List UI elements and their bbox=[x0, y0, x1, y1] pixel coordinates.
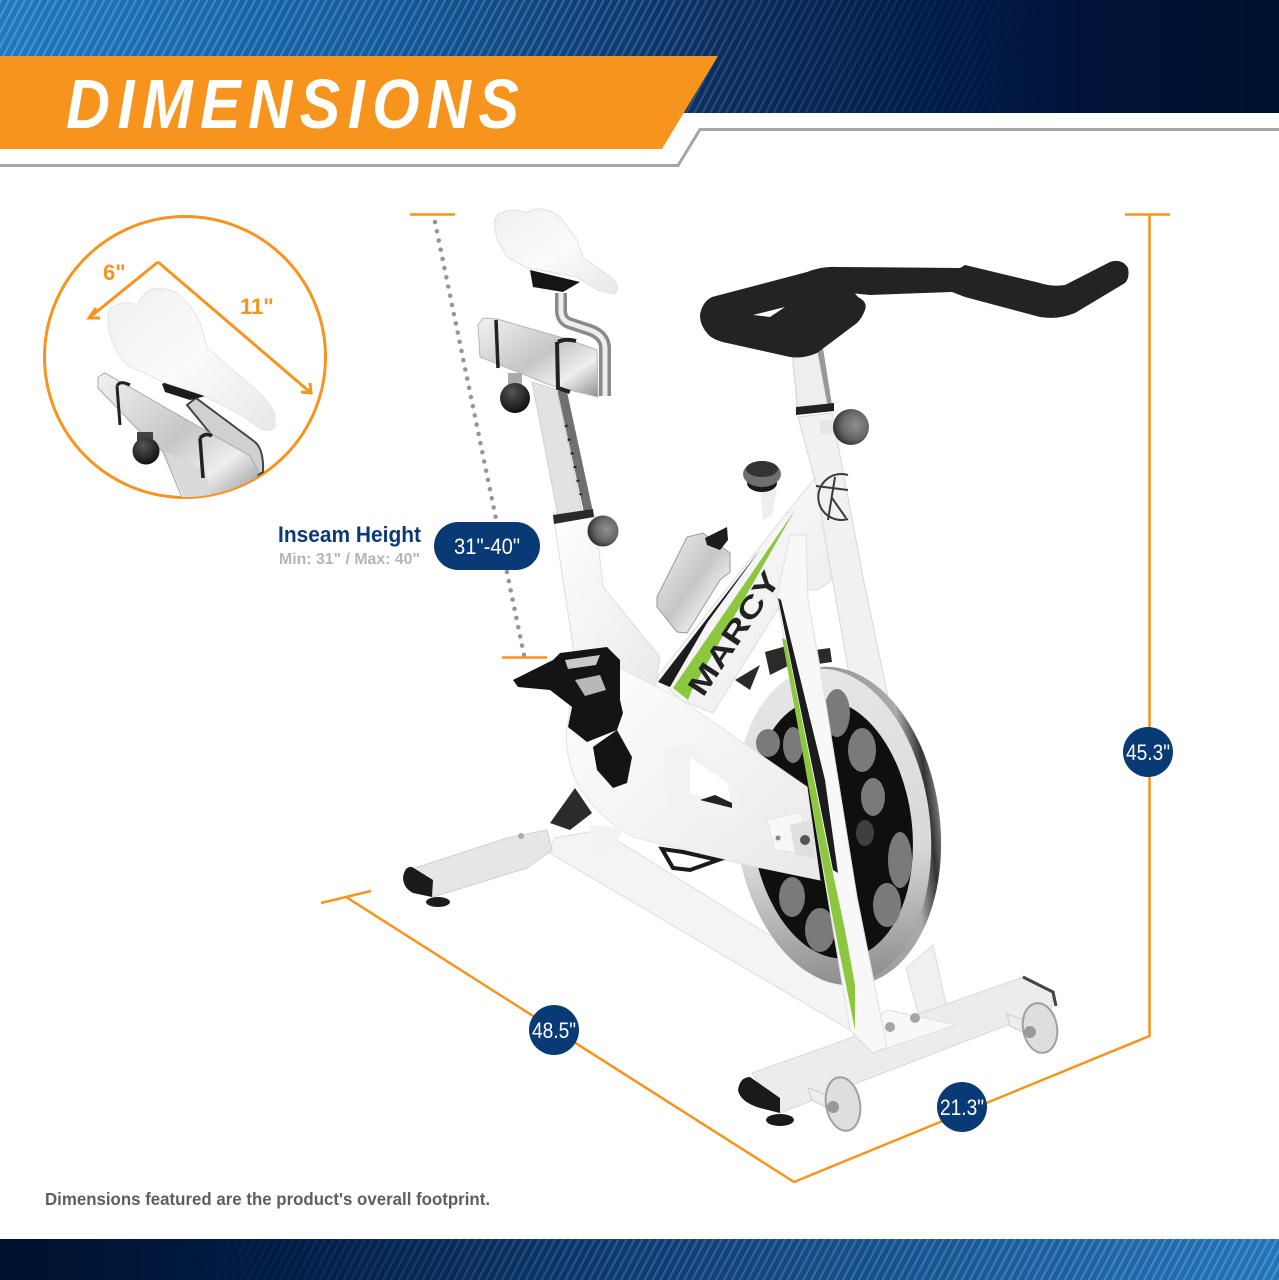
flywheel bbox=[717, 655, 959, 997]
upright tube bbox=[798, 413, 888, 697]
pedal strap bbox=[662, 849, 718, 870]
front base rail bbox=[738, 977, 1056, 1126]
frame knobs bbox=[500, 373, 869, 546]
inseam label: Inseam Height bbox=[278, 522, 422, 547]
badge: height 45.3 bbox=[1123, 727, 1173, 777]
water bottle bbox=[657, 527, 730, 633]
bottom band bbox=[0, 1239, 1279, 1280]
seat detail: post and rail bbox=[98, 373, 263, 500]
inseam label bbox=[278, 522, 540, 570]
seat detail circle bbox=[44, 216, 326, 500]
seat detail: saddle bbox=[108, 288, 275, 431]
stem collar bbox=[796, 403, 834, 415]
badge: height 45.3: 45.3" bbox=[1126, 740, 1170, 765]
brake mechanism bbox=[735, 645, 832, 690]
handlebar stem bbox=[792, 348, 832, 413]
down stay bbox=[777, 535, 887, 1053]
lower upright bbox=[906, 945, 950, 1028]
inseam label: Min: 31" / Max: 40" bbox=[279, 551, 420, 568]
housing bracket bbox=[767, 812, 815, 858]
badge: depth 21.3: 21.3" bbox=[940, 1095, 984, 1120]
dimension lines bbox=[321, 214, 1170, 1182]
long base rail bbox=[548, 830, 850, 1030]
top tube bbox=[657, 478, 832, 713]
badge: width 48.5: 48.5" bbox=[532, 1018, 576, 1043]
footnote: Dimensions featured are the product's overall footprint. bbox=[45, 1189, 490, 1209]
pedal and crank bbox=[513, 647, 632, 788]
frame stripes bbox=[658, 510, 855, 1030]
logo badge bbox=[816, 474, 848, 520]
seat tube bbox=[553, 513, 660, 700]
badge: width 48.5 bbox=[529, 1005, 579, 1055]
support leg and pad bbox=[550, 788, 625, 860]
label: 6 inch: 6" bbox=[103, 260, 126, 285]
inseam dotted line bbox=[410, 214, 547, 658]
seat post bbox=[532, 382, 588, 516]
saddle bbox=[494, 209, 617, 294]
top header band bbox=[0, 0, 1279, 113]
bike illustration bbox=[403, 209, 1129, 1134]
badge: depth 21.3 bbox=[937, 1082, 987, 1132]
title: DIMENSIONS bbox=[66, 65, 526, 143]
brand: MARCY bbox=[682, 566, 787, 702]
inseam label: 31"-40" bbox=[454, 534, 520, 559]
title banner bbox=[0, 56, 718, 149]
handlebars bbox=[700, 261, 1129, 358]
castors bbox=[808, 1000, 1061, 1134]
housing cutout bbox=[664, 745, 740, 818]
resistance knob bbox=[743, 461, 781, 520]
rear base tube bbox=[403, 830, 552, 907]
seat detail: arrows bbox=[89, 262, 311, 393]
crank housing bbox=[566, 660, 820, 880]
seat post collar bbox=[553, 509, 594, 524]
header divider line bbox=[0, 130, 1279, 166]
seat clamp block bbox=[478, 270, 605, 397]
label: 11 inch: 11" bbox=[240, 294, 274, 319]
